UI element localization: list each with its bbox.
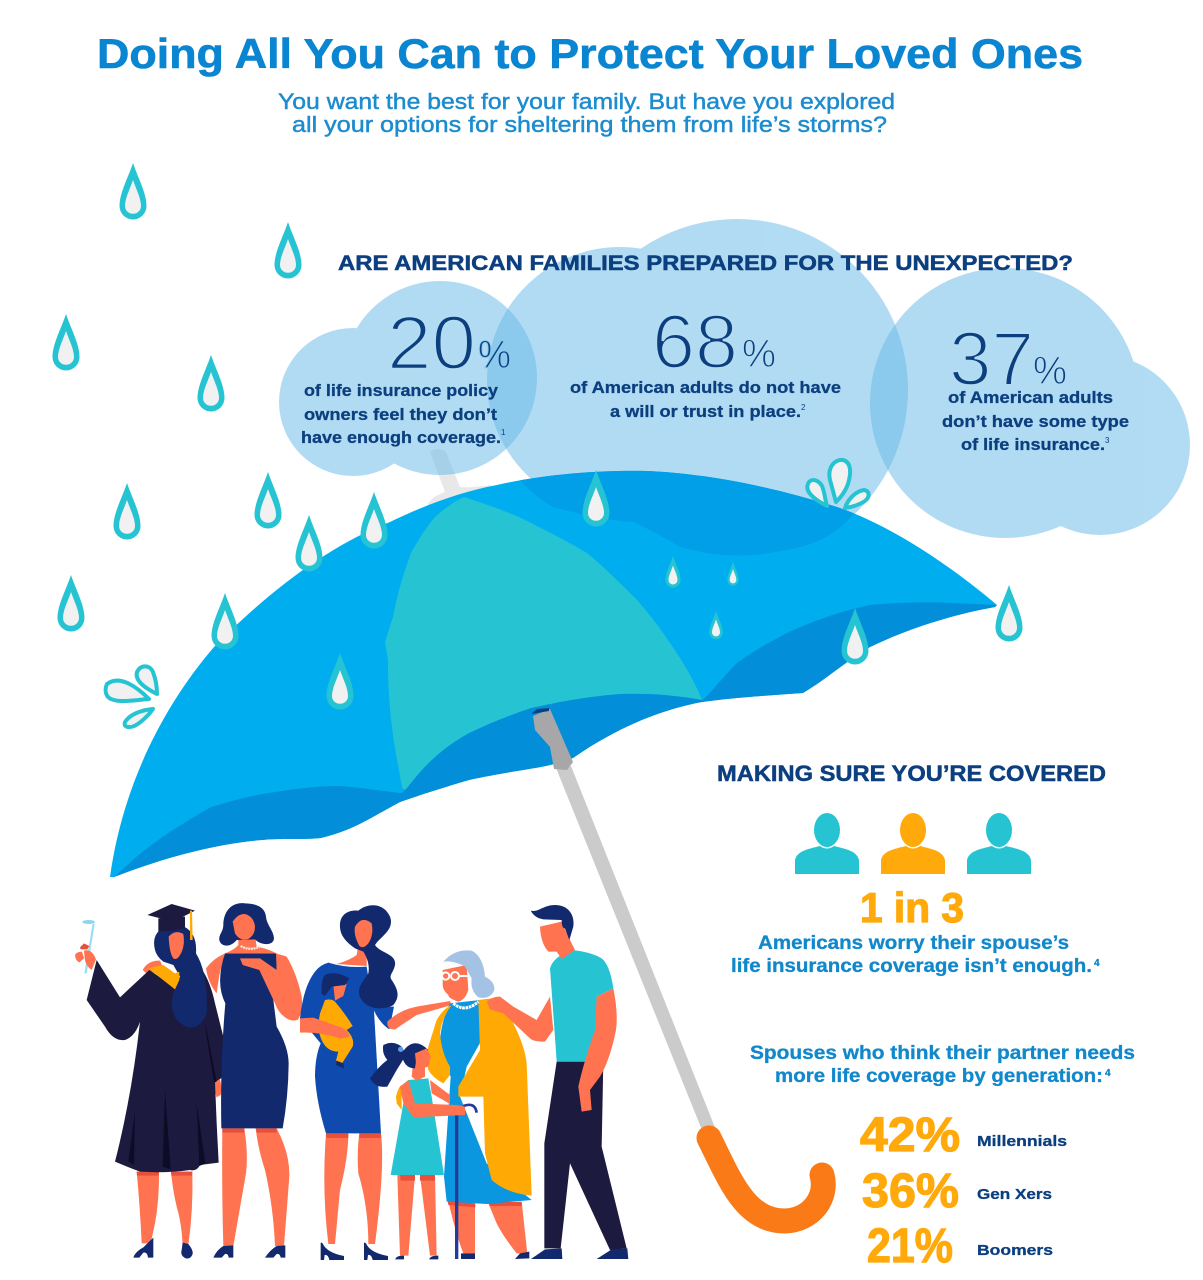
- stat: 20 percent: owners feel they don’t: [304, 405, 497, 424]
- stat: 20 percent: have enough coverage.: [301, 428, 501, 447]
- stat: boomers: [867, 1220, 1053, 1273]
- umbrella shaft: [556, 766, 716, 1135]
- cloud: 68 percent: [487, 219, 908, 561]
- icon: raindrops: [52, 163, 1022, 710]
- text: spouses by generation: Spouses who think their partner needs: [750, 1043, 1135, 1064]
- stat: 68 percent: [570, 300, 841, 421]
- umbrella top ferrule: [427, 449, 492, 508]
- icon: splash right: [807, 460, 869, 508]
- stat: 20 percent: [301, 301, 511, 447]
- title: Doing All You Can to Protect Your Loved Ones: [97, 30, 1083, 77]
- subtitle: You want the best for your family. But have you explored: [278, 89, 895, 114]
- stat: 37 percent: of life insurance.: [961, 435, 1105, 454]
- stat: gen xers: [862, 1165, 1052, 1218]
- cloud: 20 percent: [279, 281, 537, 476]
- text: spouses by generation: [750, 1043, 1135, 1087]
- text: spouses by generation: 4: [1105, 1068, 1111, 1079]
- icon: three people: [795, 813, 1031, 874]
- stat: 37 percent: %: [1033, 350, 1067, 393]
- stat: millennials: Millennials: [977, 1133, 1067, 1150]
- stat: 1 in 3: 1 in 3: [860, 884, 964, 931]
- stat: millennials: 42%: [860, 1109, 960, 1162]
- stat: boomers: 21%: [867, 1220, 953, 1273]
- stat: 68 percent: of American adults do not have: [570, 378, 841, 397]
- heading: making sure: MAKING SURE YOU’RE COVERED: [717, 761, 1106, 786]
- subtitle: all your options for sheltering them from life’s storms?: [292, 112, 887, 137]
- umbrella collar: [531, 708, 573, 770]
- cloud: 37 percent: [870, 268, 1190, 538]
- heading: prepared: ARE AMERICAN FAMILIES PREPARED FOR THE UNEXPECTED?: [338, 252, 1073, 275]
- person: graduate: [75, 904, 232, 1258]
- person: man: [487, 905, 628, 1259]
- stat: 37 percent: don’t have some type: [942, 412, 1129, 431]
- stat: gen xers: 36%: [862, 1165, 959, 1218]
- stat: 68 percent: 2: [801, 403, 806, 412]
- umbrella canopy: [110, 470, 997, 877]
- subtitle: [278, 89, 895, 137]
- text: spouses by generation: more life coverage by generation:: [775, 1066, 1103, 1087]
- text: worry: 4: [1094, 958, 1100, 969]
- icon: splash left: [106, 666, 157, 727]
- stat: 68 percent: 68: [652, 300, 738, 385]
- person: mother and baby: [300, 905, 452, 1260]
- stat: 68 percent: a will or trust in place.: [610, 402, 801, 421]
- stat: 37 percent: 3: [1105, 436, 1110, 445]
- text: worry: Americans worry their spouse’s: [758, 933, 1069, 954]
- person: girl: [370, 1043, 465, 1259]
- stat: 20 percent: %: [478, 334, 511, 377]
- stat: boomers: Boomers: [977, 1242, 1053, 1259]
- text: worry: [731, 933, 1100, 977]
- stat: gen xers: Gen Xers: [977, 1186, 1052, 1203]
- text: worry: life insurance coverage isn’t enough.: [731, 956, 1092, 977]
- person: grandmother: [427, 950, 532, 1259]
- umbrella handle: [709, 1138, 823, 1221]
- stat: 68 percent: %: [742, 333, 776, 376]
- stat: 20 percent: of life insurance policy: [304, 381, 499, 400]
- person: woman in navy dress: [206, 903, 302, 1258]
- stat: 37 percent: 37: [949, 317, 1034, 402]
- stat: millennials: [860, 1109, 1067, 1162]
- stat: 20 percent: 20: [387, 301, 476, 386]
- stat: 37 percent: [942, 317, 1129, 454]
- stat: 37 percent: of American adults: [948, 388, 1113, 407]
- stat: 20 percent: 1: [501, 428, 506, 437]
